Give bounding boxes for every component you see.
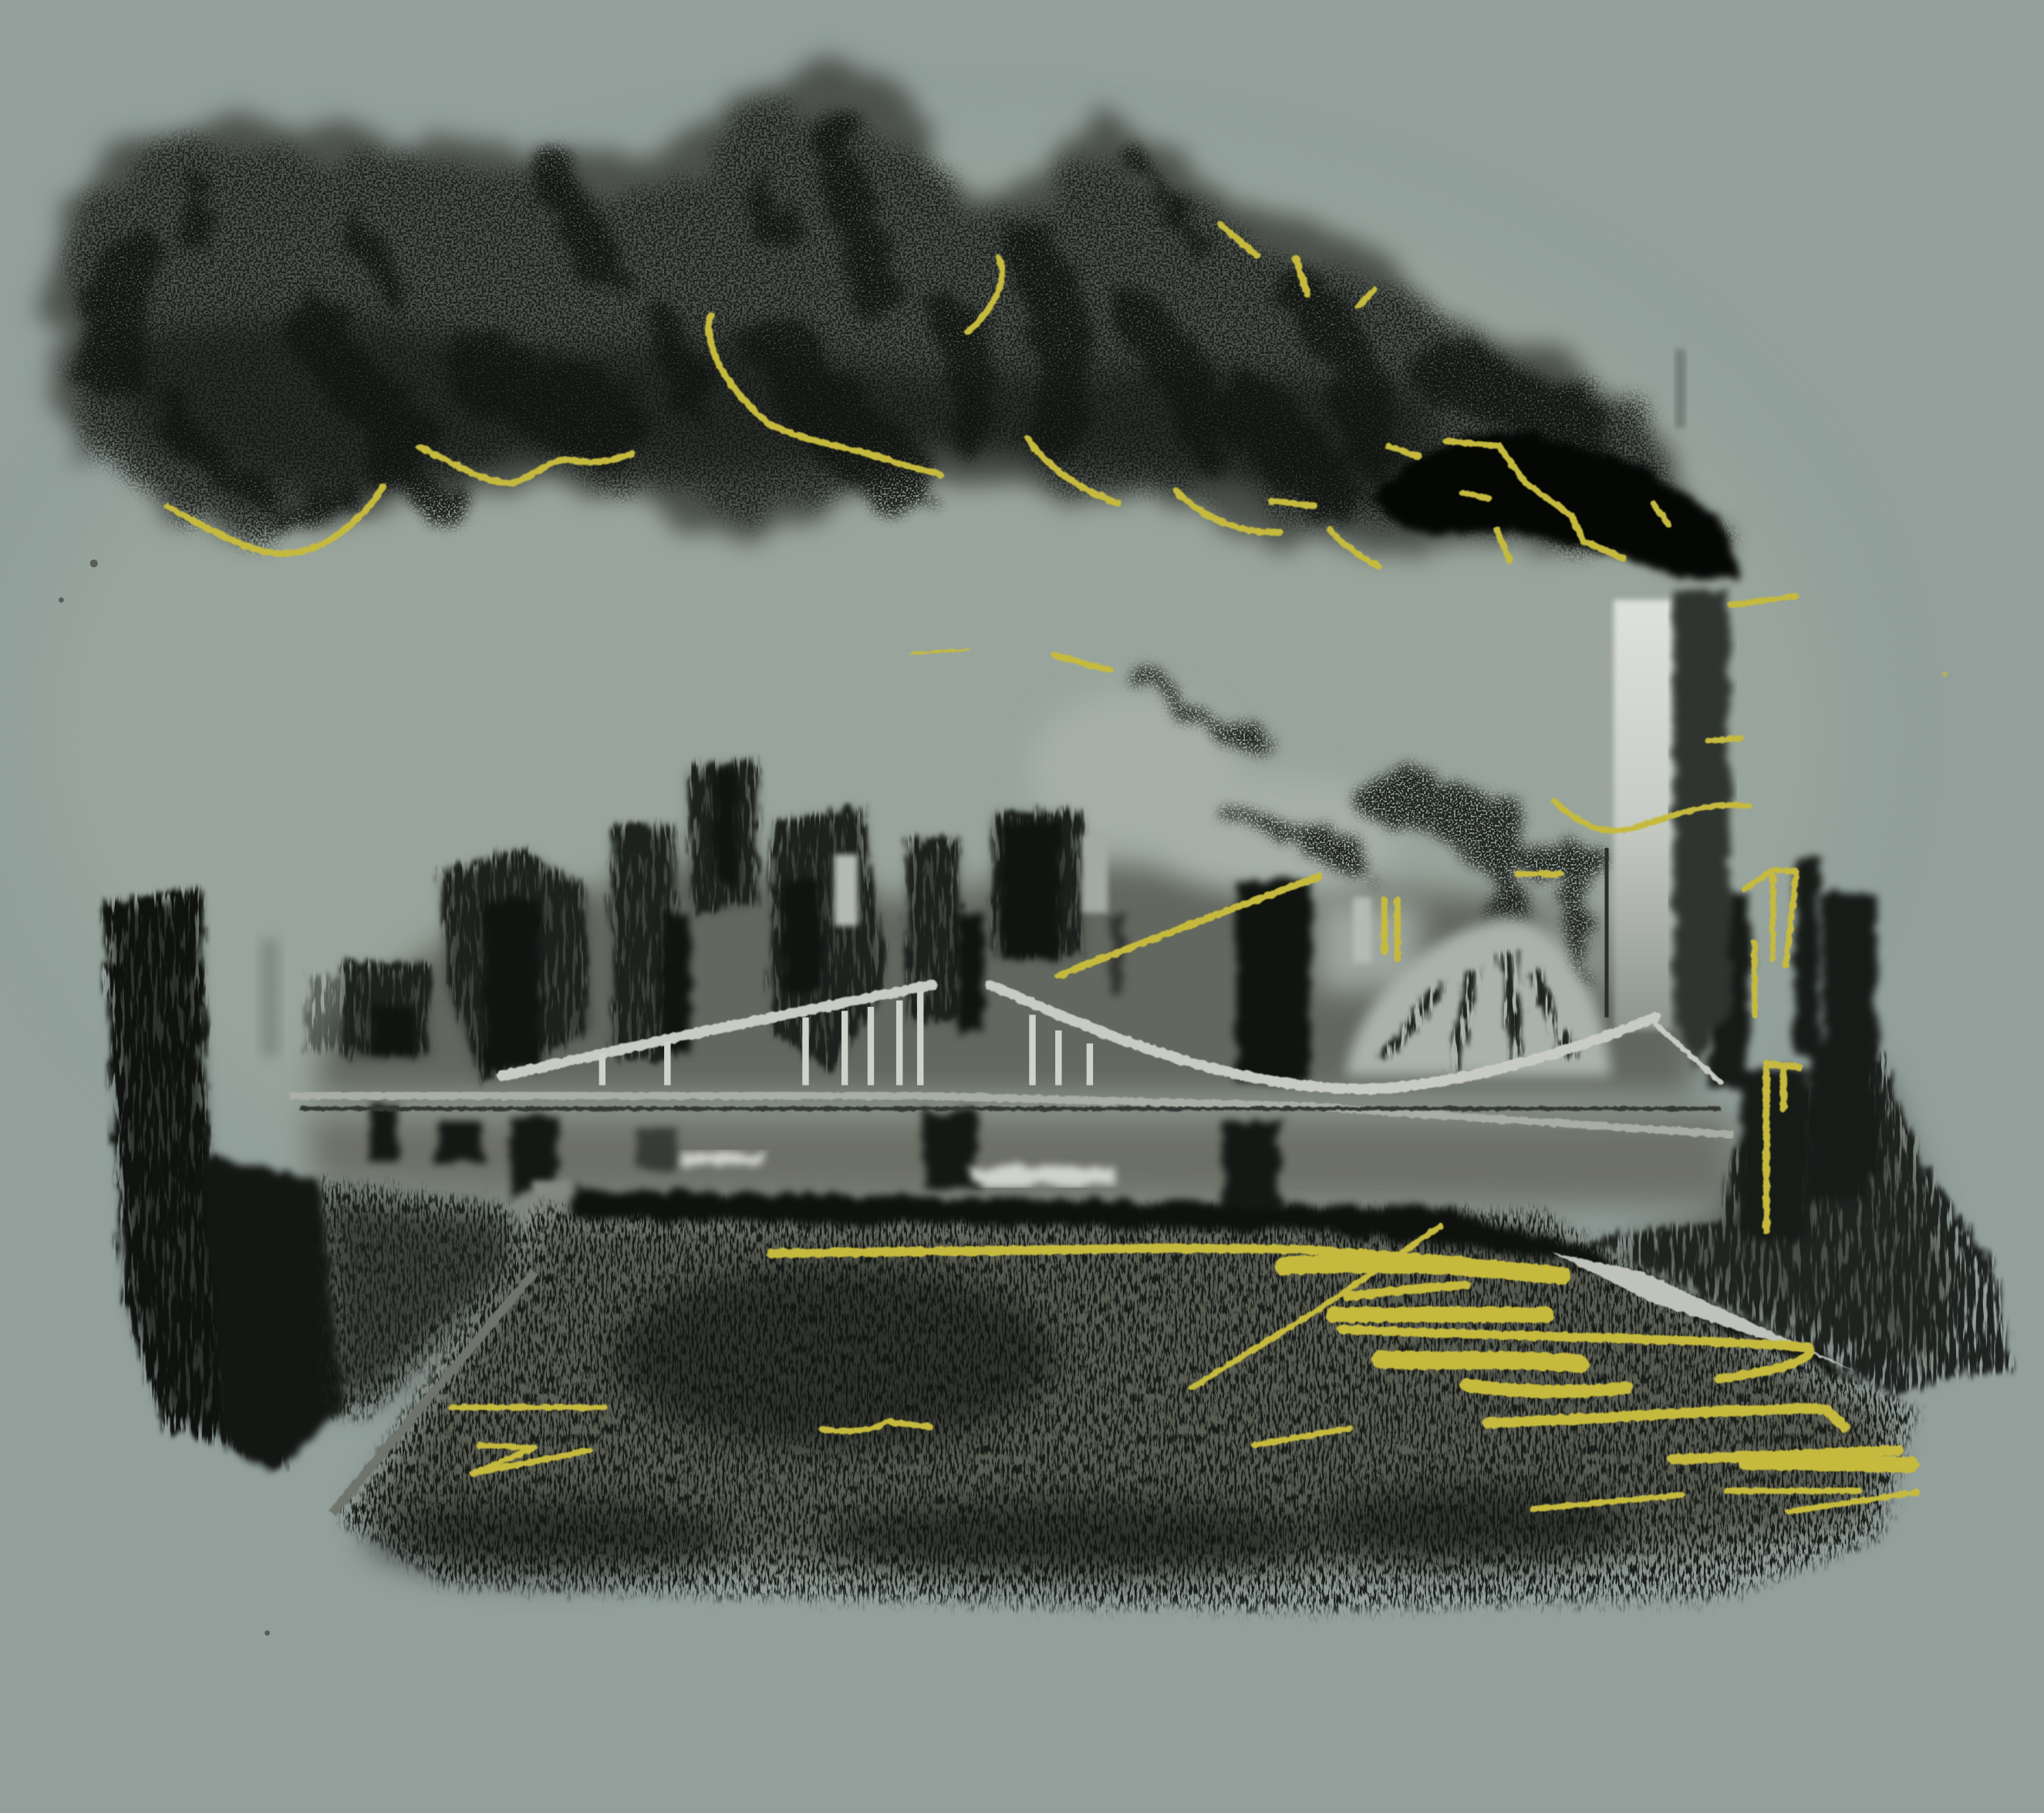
right road-side hatch bbox=[1584, 1044, 2014, 1396]
highway bbox=[332, 1190, 1916, 1611]
road charcoal texture bbox=[339, 1207, 1916, 1611]
skyline haze bbox=[313, 861, 1695, 1096]
left road edge bbox=[332, 1271, 535, 1513]
deck bbox=[289, 1096, 1734, 1135]
suspension cables bbox=[502, 984, 1721, 1089]
plume lower shading bbox=[91, 313, 1434, 508]
smoke plume bbox=[52, 69, 1740, 580]
chimney light face bbox=[1614, 600, 1672, 1031]
river highlights bbox=[684, 1153, 1115, 1184]
chimney and sky yellow lines bbox=[912, 596, 1799, 1231]
background haze bbox=[39, 170, 1838, 1291]
buildings charcoal bbox=[306, 759, 1082, 1082]
light tower windows bbox=[835, 835, 1371, 963]
right road-side wash bbox=[1610, 1069, 1955, 1363]
road short dashes bbox=[451, 1407, 1918, 1511]
left embankment bbox=[319, 1180, 521, 1415]
rising steam cloud bbox=[1030, 691, 1617, 991]
dense building marks bbox=[372, 769, 1311, 1082]
buildings wash bbox=[346, 765, 1079, 1076]
pier light faces bbox=[532, 1180, 571, 1243]
left tower wash bbox=[111, 897, 274, 1448]
bridge piers bbox=[370, 1106, 1280, 1213]
road base wash bbox=[359, 1220, 1891, 1572]
left embankment wash bbox=[319, 1193, 515, 1402]
chimney bbox=[1604, 349, 1731, 1069]
dome bbox=[1345, 917, 1611, 1076]
bridge bbox=[289, 984, 1734, 1243]
distant spire bbox=[1675, 349, 1685, 428]
road yellow scribble bbox=[772, 1226, 1911, 1465]
left tall hatch tower bbox=[102, 887, 287, 1467]
plume black core near chimney bbox=[1369, 432, 1740, 580]
plume chalk texture bbox=[72, 105, 1708, 555]
road mottling bbox=[365, 1265, 1630, 1578]
yellow chalk marks bbox=[167, 225, 1918, 1511]
chimney dark face bbox=[1674, 589, 1731, 1069]
plume yellow lines bbox=[167, 225, 1668, 566]
plume dark swipes bbox=[110, 137, 1584, 515]
pale distant tower bbox=[261, 939, 279, 1056]
city skyline bbox=[261, 349, 2014, 1396]
left lower mass bbox=[202, 1154, 346, 1471]
chimney left edge bbox=[1604, 848, 1609, 1018]
bridge hangers bbox=[602, 991, 1090, 1085]
right tower dark strokes bbox=[1710, 861, 1877, 1239]
dome ribs bbox=[1381, 952, 1571, 1069]
dome body bbox=[1345, 917, 1611, 1076]
right road edge highlight bbox=[1551, 1252, 1857, 1372]
steam dark strokes bbox=[1147, 678, 1584, 978]
charcoal dust specks bbox=[59, 559, 1948, 1636]
left buildings block bbox=[102, 887, 521, 1471]
under-bridge band bbox=[306, 1116, 1734, 1207]
plume soft silhouette bbox=[52, 69, 1722, 567]
road far edge dark bbox=[574, 1190, 1851, 1383]
